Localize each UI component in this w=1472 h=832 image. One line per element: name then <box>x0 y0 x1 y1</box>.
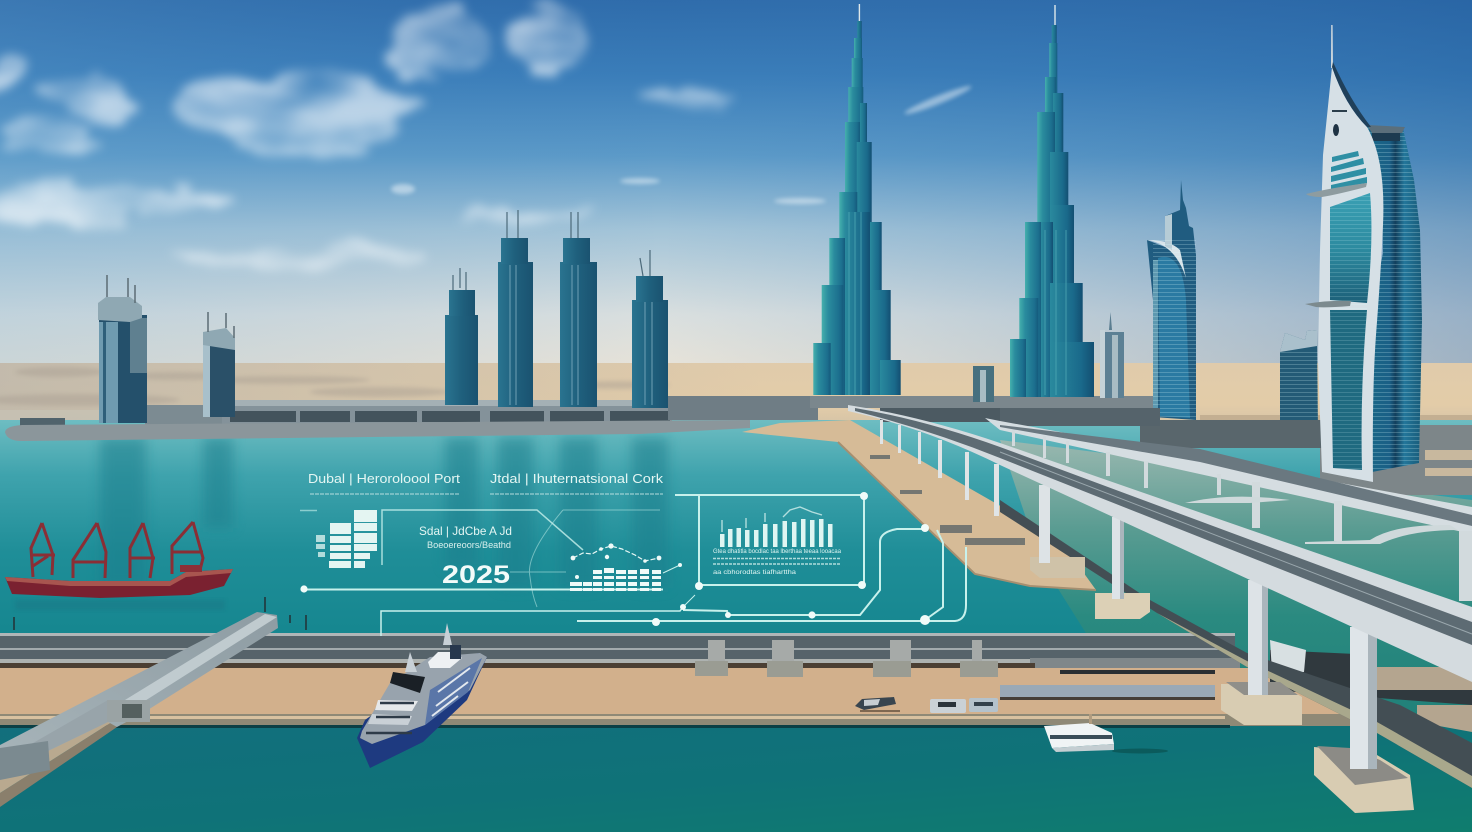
sand quay <box>0 668 1350 728</box>
quay road <box>0 633 1250 672</box>
desert dunes <box>0 363 1472 433</box>
mini line and stacked chart <box>570 543 682 591</box>
supertall tower left <box>813 4 901 395</box>
concrete pier ramp <box>0 597 306 807</box>
diagonal ground roadway <box>1000 500 1472 788</box>
overlay subheading centre: Boeoereoors/Beathd <box>427 540 511 550</box>
sail-shaped tower <box>1305 25 1422 482</box>
container row and dark vehicles <box>1000 670 1215 700</box>
road bridge piers on quay <box>695 640 998 677</box>
curved tower mid right <box>1147 180 1196 420</box>
building behind sail tower <box>1280 330 1318 434</box>
tower 1 <box>98 275 147 423</box>
far roadway piers <box>1012 430 1472 601</box>
framed bar chart: aa cbhorodtas tiafharttha <box>713 570 797 576</box>
blue and white ferry <box>357 623 487 768</box>
waterfront promenade <box>742 420 1096 590</box>
clouds <box>0 0 973 267</box>
tower 6 <box>632 250 668 408</box>
holographic data overlay <box>300 471 966 636</box>
overlay title left: Dubal | Heroroloool Port <box>308 471 460 486</box>
supertall tower right <box>1010 5 1094 397</box>
framed bar chart <box>713 507 842 576</box>
parked vehicles <box>855 697 998 713</box>
tower 4 <box>498 210 533 407</box>
right water behind bridges <box>1000 440 1472 735</box>
tower 3 <box>445 268 478 405</box>
tower 2 <box>203 312 235 417</box>
small buildings centre <box>973 312 1124 402</box>
connector nodes <box>300 492 930 626</box>
overlay title right: Jtdal | Ihuternatsional Cork <box>490 471 664 486</box>
far elevated roadway <box>985 418 1472 601</box>
distant towers left <box>98 210 668 423</box>
upper harbour water <box>0 420 1472 640</box>
block chart <box>316 510 377 568</box>
crane 2 <box>73 523 106 578</box>
year figure: 2025 <box>442 561 510 589</box>
crane 1 <box>31 523 55 577</box>
right mainland terraces <box>1270 640 1472 732</box>
small passenger boat <box>1044 714 1168 754</box>
overlay heading centre: Sdal | JdCbe A Jd <box>419 524 512 538</box>
red cargo ship <box>5 522 233 610</box>
far right land <box>1000 408 1472 495</box>
title underlines <box>310 493 663 495</box>
lower sea <box>0 726 1472 832</box>
main roadway piers <box>880 420 1414 813</box>
sky background <box>0 0 1472 370</box>
crane 4 <box>172 522 203 574</box>
tower 5 <box>560 212 597 407</box>
main elevated roadway <box>848 405 1472 813</box>
chart caption: Gtea dhatitla bocdlac taa lberthaa teeaa looacaa <box>713 549 842 555</box>
connector lines <box>300 495 966 636</box>
waterfront complex on far shore <box>5 396 1155 441</box>
crane 3 <box>130 523 155 578</box>
